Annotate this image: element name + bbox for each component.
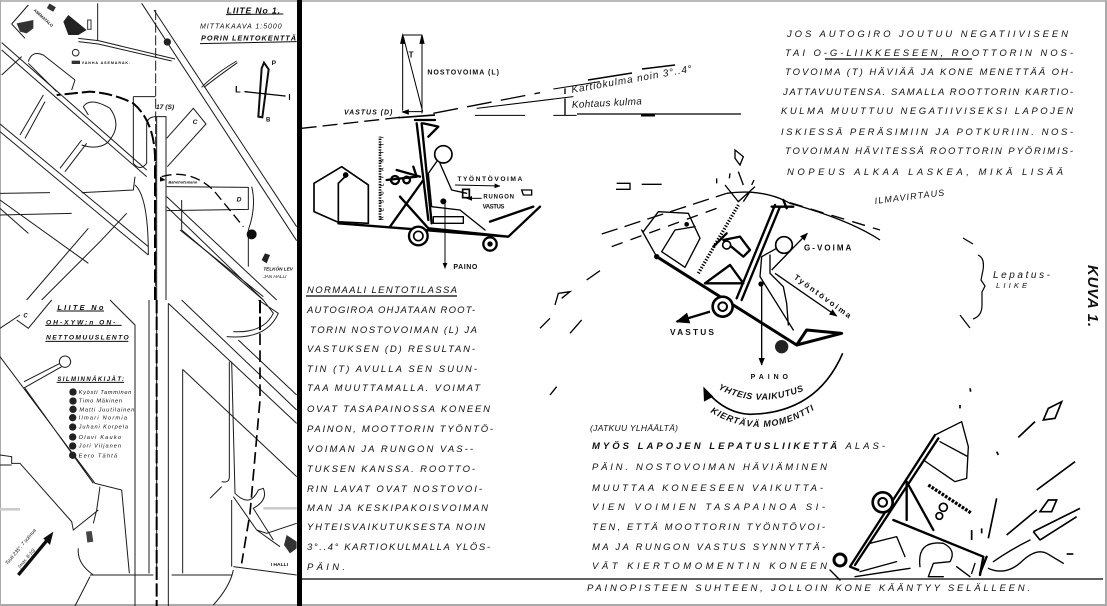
map small labels: Bahnhofsmann — [168, 179, 198, 184]
map north arrow — [235, 60, 291, 124]
map title — [200, 5, 297, 44]
witnesses list: Matti Juutilainen — [79, 408, 134, 414]
map heading: liite — [45, 303, 129, 341]
text block: continuation — [587, 423, 1030, 594]
text block: normal flight: YHTEISVAIKUTUKSESTA NOIN — [307, 522, 485, 533]
debris — [960, 388, 1080, 554]
text block: normal flight: VASTUKSEN (D) RESULTAN- — [307, 344, 475, 355]
text block: normal flight: TORIN NOSTOVOIMAN (L) JA — [310, 325, 477, 336]
wind arrow: (max. 8-10) — [17, 547, 36, 569]
witnesses list: Kyösti Tamminen — [79, 390, 131, 396]
labels: PAINO — [453, 264, 478, 271]
text block: continuation: PÄIN. NOSTOVOIMAN HÄVIÄMINEN — [592, 462, 827, 473]
ground line — [300, 578, 1103, 580]
wind arrow — [4, 528, 53, 575]
text block: continuation: MA JA RUNGON VASTUS SYNNYTTÄ- — [592, 542, 825, 553]
text block: normal flight: NORMAALI LENTOTILASSA — [307, 285, 457, 296]
map small labels: VANHA ASEMARAK. — [82, 61, 130, 65]
text block: normal flight: PAINON, MOOTTORIN TYÖNTÖ- — [307, 424, 493, 435]
map upper section — [0, 3, 297, 300]
witnesses list: Ilmari Normia — [79, 415, 127, 421]
text block: normal flight: VOIMAN JA RUNGON VAS-- — [307, 444, 473, 455]
map heading: liite: LIITE No — [57, 303, 104, 312]
moment labels: KIERTÄVÄ MOMENTTI — [710, 404, 814, 428]
map small labels: D — [237, 197, 242, 204]
text block: normal flight: RIN LAVAT OVAT NOSTOVOI- — [307, 484, 482, 495]
map small labels: TELKÖN LEV — [263, 266, 294, 272]
label: lepatusliike: Lepatus- — [993, 270, 1051, 281]
map north arrow: B — [266, 118, 271, 124]
force arrows — [677, 233, 837, 365]
brace: flutter motion — [960, 238, 985, 328]
map lower section — [0, 300, 297, 606]
labels: G-VOIMA — [804, 244, 852, 253]
moment labels — [710, 384, 814, 428]
label: lepatusliike — [993, 270, 1051, 290]
map heading: liite: NETTOMUUSLENTO — [46, 334, 129, 341]
rotor cone angle labels — [571, 64, 741, 115]
labels: T — [409, 50, 414, 59]
text block: continuation: PAINOPISTEEN SUHTEEN, JOLLOIN KONE KÄÄNTYY SELÄLLEEN. — [587, 583, 1030, 594]
text block: top right: NOPEUS ALKAA LASKEA, MIKÄ LISÄÄ — [787, 167, 1063, 178]
witnesses list: Eero Tähtä — [79, 453, 117, 459]
map north arrow: P — [272, 60, 277, 67]
diagram: normal flight autogiro — [302, 35, 600, 271]
pilot — [758, 237, 793, 330]
labels: RUNGON — [483, 194, 514, 200]
text block: top right: TAI O-G-LIIKKEESEEN, ROOTTORIN NOS- — [785, 48, 1073, 59]
text block: normal flight: 3°..4° KARTIOKULMALLA YLÖS- — [307, 542, 490, 553]
map lower section: C — [23, 313, 28, 319]
labels: RESULTANTTI — [379, 136, 385, 220]
diagram: stalled autogiro — [540, 150, 880, 414]
text block: top right: TOVOIMAN HÄVITESSÄ ROOTTORIN PYÖRIMIS- — [785, 146, 1073, 157]
text block: continuation: TEN, ETTÄ MOOTTORIN TYÖNTÖVOI- — [592, 522, 825, 533]
text block: top right: TOVOIMA (T) HÄVIÄÄ JA KONE MENETTÄÄ OH- — [785, 67, 1073, 78]
witnesses list: Timo Mäkinen — [79, 398, 122, 404]
black divider band — [297, 0, 302, 606]
labels: TYÖNTÖVOIMA — [457, 174, 523, 183]
text block: continuation: VIEN VOIMIEN TASAPAINOA SI- — [592, 502, 825, 513]
wind arrow: Tuuli 235°, 7 solmua — [4, 528, 38, 566]
label: ilmavirtaus: ILMAVIRTAUS — [874, 188, 945, 206]
text block: continuation: VÄT KIERTOMOMENTIN KONEEN — [592, 561, 827, 572]
diagram: inverted autogiro — [830, 388, 1080, 580]
map small labels: ASEMATALO — [33, 8, 54, 28]
text block: normal flight — [306, 285, 493, 573]
moment arc — [703, 353, 843, 414]
witnesses list: Juhani Korpela — [78, 424, 128, 430]
text block: top right: KULMA MUUTTUU NEGATIIVISEKSI LAPOJEN — [781, 106, 1073, 117]
force vectors — [401, 35, 565, 268]
witnesses list: Jori Viljanen — [78, 444, 121, 450]
tail — [923, 422, 968, 482]
labels: NOSTOVOIMA (L) — [427, 69, 499, 76]
text block: normal flight: MAN JA KESKIPAKOISVOIMAN — [307, 503, 488, 514]
map lower section: I HALLI — [271, 562, 289, 568]
labels: VASTUS (D) — [344, 109, 393, 116]
text block: continuation: MUUTTAA KONEESEEN VAIKUTTA- — [592, 483, 823, 494]
map small labels: C — [193, 119, 198, 126]
tail fin — [314, 167, 368, 223]
text block: normal flight: TIN (T) AVULLA SEN SUUN- — [307, 364, 477, 375]
panel: airfield map — [0, 3, 297, 606]
text block: continuation: MYÖS LAPOJEN LEPATUSLIIKETTÄ ALAS- — [592, 441, 885, 452]
map buildings — [12, 4, 270, 263]
moment labels: YHTEIS VAIKUTUS — [720, 384, 803, 400]
airflow dashes and rotor — [540, 150, 880, 395]
witnesses list: Olavi Kauko — [79, 435, 121, 441]
airframe — [338, 120, 540, 251]
text block: normal flight: AUTOGIROA OHJATAAN ROOT- — [306, 305, 475, 316]
text block: top right: JATTAVUUTENSA. SAMALLA ROOTTORIN KARTIO- — [782, 87, 1073, 98]
text block: top right: ISKIESSÄ PERÄSIMIIN JA POTKURIIN. NOS- — [781, 127, 1073, 138]
witnesses list — [57, 376, 134, 459]
text block: top right — [781, 29, 1073, 178]
text block: continuation: (JATKUU YLHÄÄLTÄ) — [590, 423, 678, 433]
rotor cone angle labels: Kohtaus kulma — [572, 96, 642, 111]
pilot and wreck — [830, 537, 1063, 580]
labels: VASTUS — [670, 327, 714, 337]
map small labels: JAN HALLI — [262, 274, 287, 279]
labels — [344, 50, 523, 271]
text block: normal flight: OVAT TASAPAINOSSA KONEEN — [307, 404, 490, 415]
map north arrow: I — [288, 93, 291, 102]
text block: normal flight: TAA MUUTTAMALLA. VOIMAT — [307, 383, 481, 394]
text block: normal flight: PÄIN. — [307, 562, 345, 573]
map small labels — [33, 8, 294, 279]
map heading: liite: OH-XYW:n ON- — [46, 319, 116, 326]
text block: normal flight: TUKSEN KANSSA. ROOTTO- — [307, 464, 475, 475]
map title: LIITE No 1. — [227, 5, 280, 15]
witnesses list: SILMINNÄKIJÄT: — [57, 376, 124, 383]
labels: PAINO — [751, 374, 789, 381]
map title: PORIN LENTOKENTTÄ — [201, 34, 296, 43]
map small labels: 17 (S) — [156, 104, 175, 111]
map title: MITTAKAAVA 1:5000 — [200, 23, 282, 30]
labels: Työntövoima — [792, 273, 853, 320]
text block: top right: JOS AUTOGIRO JOUTUU NEGATIIVISEEN — [786, 29, 1068, 40]
pilot — [428, 146, 532, 230]
label: kuva 1: KUVA 1. — [1084, 265, 1101, 327]
label: lepatusliike: LIIKE — [996, 281, 1028, 290]
map north arrow: L — [235, 85, 241, 95]
labels: VASTUS — [483, 204, 504, 210]
rotor cone angle labels: Kartiokulma noin 3°..4° — [571, 64, 693, 96]
airframe — [834, 435, 983, 575]
tail and airframe — [642, 200, 842, 353]
labels — [670, 244, 853, 381]
